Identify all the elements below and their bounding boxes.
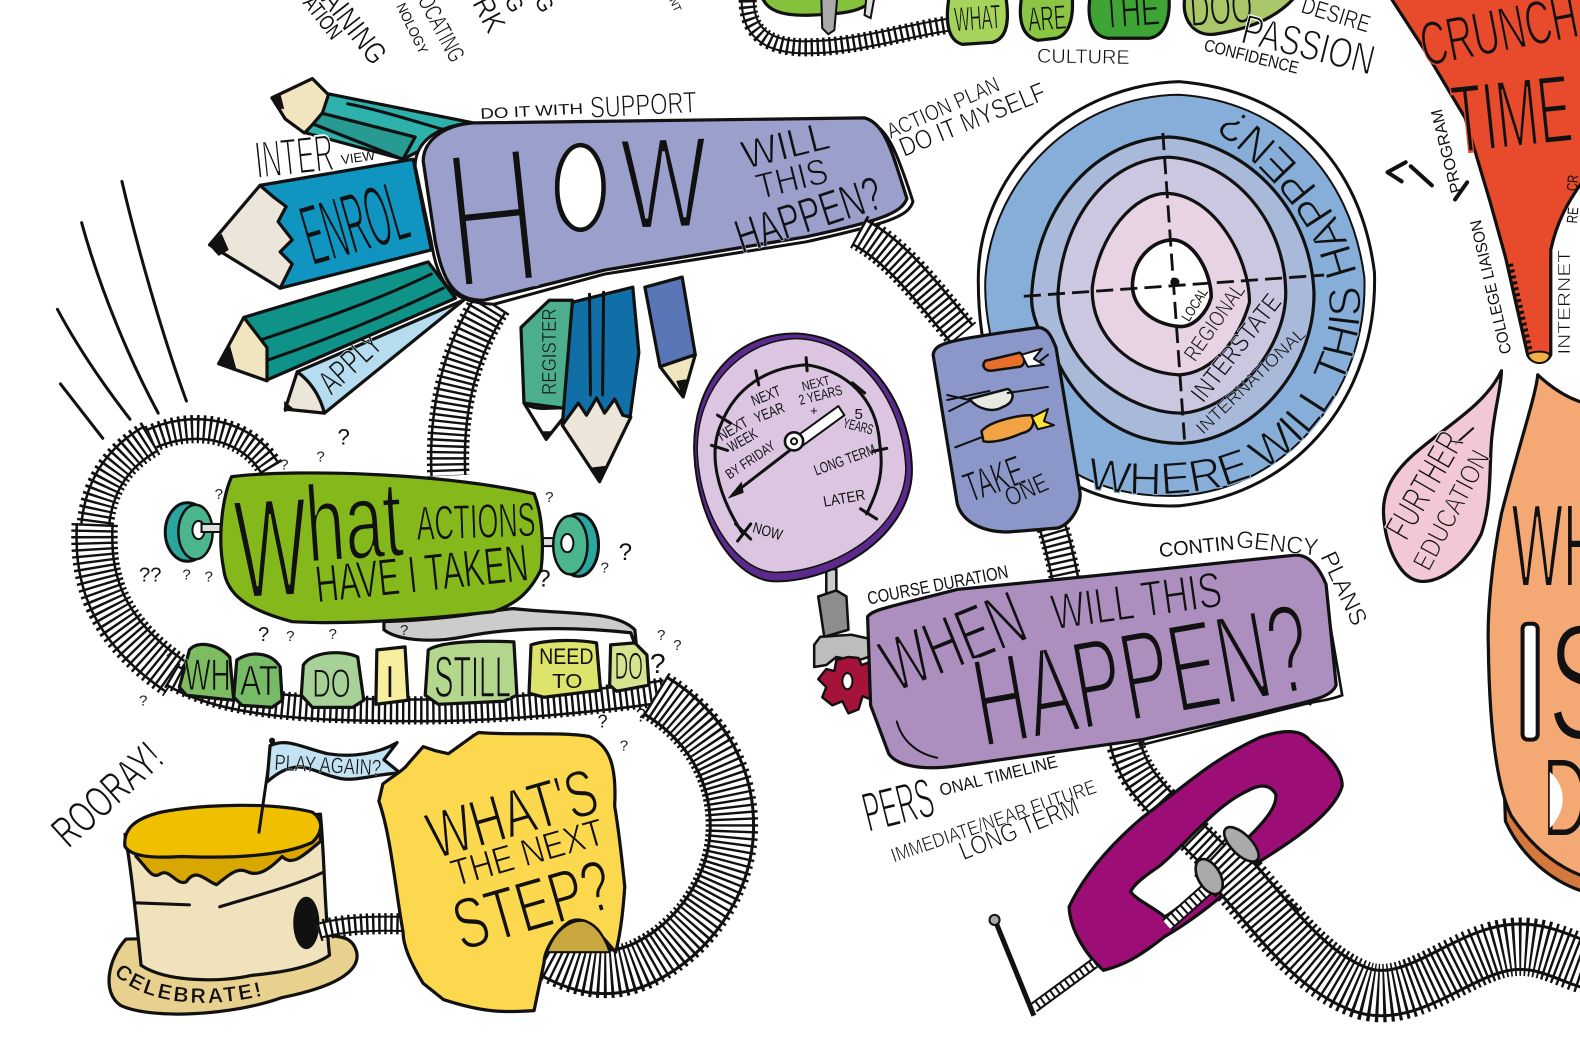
block: wh: WH xyxy=(184,651,231,700)
dial labels xyxy=(715,372,878,544)
dial scale xyxy=(715,365,881,532)
scattered question marks: ? xyxy=(657,627,665,644)
dial labels: YEARS xyxy=(842,415,875,437)
ring: regional xyxy=(1092,193,1249,375)
scattered question marks: ? xyxy=(400,622,408,639)
clamp discs xyxy=(1190,822,1264,899)
labels: course duration, contingency plans xyxy=(866,526,1372,630)
take one panel xyxy=(933,327,1080,532)
interview label xyxy=(252,124,377,190)
gauge stem xyxy=(814,569,879,667)
dial labels: WEEK xyxy=(725,426,761,456)
label: culture: CULTURE xyxy=(1037,45,1130,69)
cake plate xyxy=(109,935,357,1014)
tube: take one to when xyxy=(1046,509,1066,582)
tube: how to what actions xyxy=(448,302,492,476)
block: still xyxy=(425,641,517,710)
cake door xyxy=(293,897,319,949)
icing top xyxy=(125,805,321,857)
label: do it with support: SUPPORT xyxy=(589,86,698,125)
gauge xyxy=(694,334,912,581)
how: will this happen: HAPPEN? xyxy=(728,166,889,264)
block: still: STILL xyxy=(434,645,511,710)
heading: education: EDUCATION xyxy=(1406,444,1496,575)
icon: white radish xyxy=(947,387,1048,411)
crosshair xyxy=(1024,133,1324,446)
heading: actions: ACTIONS xyxy=(416,493,536,551)
flag xyxy=(267,743,400,782)
heading: what, hat: hat xyxy=(302,458,407,586)
labels: desire, passion, confidence xyxy=(1202,0,1380,84)
label: do it with support xyxy=(480,86,698,125)
label: action plan, do it myself: ACTION PLAN xyxy=(883,72,1003,144)
clamp handle xyxy=(990,915,1034,1016)
heading: will this: WILL THIS xyxy=(1048,560,1225,641)
tube: what actions arch xyxy=(146,429,270,469)
ring labels xyxy=(1178,279,1310,438)
dial labels: 5 xyxy=(854,406,863,423)
top word blocks xyxy=(947,0,1296,44)
label: one: ONE xyxy=(1000,467,1053,512)
dial labels: NEXT xyxy=(749,383,783,410)
scattered question marks: ? xyxy=(215,486,223,503)
block: need to: NEED xyxy=(539,644,594,669)
text: ENROL xyxy=(291,163,418,284)
pencil: teal top xyxy=(270,79,474,159)
what actions panel xyxy=(221,458,542,628)
tube: when down through the clamp xyxy=(1124,734,1290,922)
block: at: AT xyxy=(240,657,278,704)
ring labels: LOCAL xyxy=(1178,285,1211,324)
cropped text fragments at top xyxy=(298,0,683,71)
block: at xyxy=(234,654,282,707)
orange panel xyxy=(1488,375,1580,892)
labels: personal timeline: PERS xyxy=(856,766,940,844)
ring: local xyxy=(1132,240,1211,327)
white counter of letter i xyxy=(1523,624,1538,740)
icon: orange carrot xyxy=(947,349,1048,400)
icing drips xyxy=(136,821,320,885)
dial labels: + xyxy=(810,403,818,418)
further education drop xyxy=(1377,371,1501,581)
clamp screw xyxy=(1034,877,1221,1008)
white counter of letter d xyxy=(1550,772,1563,828)
curved heading: where will this happen: WHERE WILL THIS HAPPEN? xyxy=(1091,114,1360,496)
scattered question marks: ? xyxy=(328,626,337,643)
cropped text fragments at top: NOLOGY xyxy=(393,0,432,57)
target: where will this happen xyxy=(976,80,1376,508)
heading: step: STEP? xyxy=(444,844,621,967)
dial labels: NOW xyxy=(751,520,785,544)
heading: what, capital w: W xyxy=(231,467,312,628)
pencil: apply xyxy=(284,300,464,413)
label: rooray: ROORAY! xyxy=(42,733,173,857)
scattered question marks: ? xyxy=(286,628,295,645)
ring labels: INTERNATIONAL xyxy=(1192,324,1310,438)
tube: left side xyxy=(94,524,176,677)
icon: yellow carrot xyxy=(955,409,1054,447)
heading: the next: THE NEXT xyxy=(446,811,609,895)
tube: top connector xyxy=(748,0,952,47)
label: take one: TAKE xyxy=(957,446,1030,511)
pencil: blue xyxy=(562,287,639,483)
icon: red gear xyxy=(818,657,879,713)
scattered question marks: ? xyxy=(619,539,632,566)
interview label: VIEW xyxy=(340,147,377,167)
labels: personal timeline: LONG TERM xyxy=(954,791,1083,866)
scattered question marks: ? xyxy=(205,568,213,585)
labels: personal timeline: IMMEDIATE/NEAR FUTURE xyxy=(888,776,1099,867)
block: need to: TO xyxy=(552,671,582,693)
heading: happen: HAPPEN? xyxy=(962,576,1321,774)
dial labels: 2 YEARS xyxy=(797,382,844,408)
labels: course duration, contingency plans: GENCY xyxy=(1235,526,1320,562)
top green machine xyxy=(762,0,875,34)
needle xyxy=(728,406,844,499)
scattered question marks xyxy=(139,424,682,755)
heading: have i taken: HAVE I TAKEN xyxy=(313,534,531,614)
block: do small: DO xyxy=(615,645,643,688)
labels around funnel: PROGRAM xyxy=(1428,107,1466,195)
label: action plan, do it myself: DO IT MYSELF xyxy=(894,76,1050,163)
heading: how, letter H: H xyxy=(435,102,550,332)
dial labels: LONG TERM xyxy=(812,441,878,479)
labels: course duration, contingency plans: COURSE DURATION xyxy=(866,562,1010,608)
scattered question marks: ? xyxy=(258,624,269,646)
how: will this happen: THIS xyxy=(752,150,832,207)
heading: further: FURTHER xyxy=(1377,424,1473,547)
tube: under word blocks xyxy=(171,675,665,710)
scattered question marks: ? xyxy=(182,566,191,583)
grey shelf xyxy=(384,609,637,650)
how: letter O: O xyxy=(550,123,609,255)
word blocks: what do i still need to do xyxy=(179,640,649,710)
scattered question marks: ? xyxy=(545,489,554,506)
wheel: right xyxy=(539,514,599,576)
block: i: I xyxy=(386,658,394,707)
heading: what's: WHAT'S xyxy=(419,755,606,874)
how panel xyxy=(415,102,913,332)
dial labels: NEXT xyxy=(715,414,751,445)
block: i xyxy=(376,647,408,707)
labels: desire, passion, confidence: CONFIDENCE xyxy=(1202,36,1301,78)
white counter of the O xyxy=(557,145,604,230)
labels: desire, passion, confidence: PASSION xyxy=(1237,5,1380,84)
block: do xyxy=(301,653,364,707)
how: will this happen xyxy=(728,113,889,264)
dial labels: LATER xyxy=(822,487,867,511)
labels: personal timeline: ONAL TIMELINE xyxy=(938,752,1059,800)
cake seam xyxy=(135,873,322,907)
how: will this happen: WILL xyxy=(737,113,834,178)
dial labels: NEXT xyxy=(800,372,831,394)
ring labels: INTERSTATE xyxy=(1184,288,1287,408)
labels around funnel: INTERNET xyxy=(1555,249,1574,355)
label: play again: PLAY AGAIN? xyxy=(274,750,382,780)
labels: course duration, contingency plans: CONTIN xyxy=(1158,532,1235,562)
next step panel xyxy=(379,733,625,1012)
clamp xyxy=(990,732,1342,1016)
labels around funnel: COLLEGE LIAISON xyxy=(1467,218,1515,356)
block: do small xyxy=(610,643,649,691)
next step arch xyxy=(547,921,610,952)
interview label: INTER xyxy=(252,124,336,190)
cake body xyxy=(125,814,330,980)
pencil: periwinkle xyxy=(645,277,695,398)
label: register: REGISTER xyxy=(539,308,561,395)
crunch time funnel xyxy=(1390,0,1580,363)
block: need to xyxy=(529,640,601,697)
label: apply: APPLY xyxy=(311,325,390,402)
tube: wavy to the right xyxy=(1214,854,1580,993)
when panel xyxy=(868,555,1342,774)
how: letter W: W xyxy=(619,108,711,258)
flag pole xyxy=(259,742,272,832)
scattered question marks: ? xyxy=(620,738,628,755)
scattered question marks: ? xyxy=(280,457,289,474)
scattered question marks: ? xyxy=(139,692,147,709)
label: celebrate: CELEBRATE! xyxy=(116,966,260,1004)
cake xyxy=(107,738,400,1016)
ring: interstate xyxy=(1058,157,1286,413)
labels: course duration, contingency plans: PLANS xyxy=(1315,547,1372,630)
scattered question marks: ? xyxy=(316,448,325,465)
tube: cake to next step xyxy=(318,924,405,931)
radiating action lines xyxy=(57,181,186,438)
dial labels: YEAR xyxy=(752,399,787,427)
scattered question marks: ? xyxy=(163,646,172,663)
tube: arch shoulder xyxy=(95,438,151,529)
label: do it with support: DO IT WITH xyxy=(480,101,583,123)
ring: international xyxy=(1032,137,1314,443)
scattered question marks: ? xyxy=(650,647,666,679)
scattered question marks: ? xyxy=(601,559,609,576)
tube: right loop xyxy=(544,695,732,972)
labels: personal timeline xyxy=(856,752,1099,867)
wheels xyxy=(165,503,599,576)
scattered question marks: ? xyxy=(338,424,350,449)
tube: how to take one xyxy=(859,232,962,335)
labels around funnel xyxy=(1388,107,1580,356)
scattered question marks: ? xyxy=(673,637,682,654)
heading: when: WHEN xyxy=(869,575,1038,709)
heading: letter i: I xyxy=(1517,590,1543,776)
block: wh xyxy=(179,644,234,700)
dial labels: BY FRIDAY xyxy=(722,437,778,482)
pencil: enrol xyxy=(209,159,431,288)
scattered question marks: ? xyxy=(636,705,646,725)
block: do: DO xyxy=(312,661,351,706)
scattered question marks: ? xyxy=(537,565,551,592)
ring labels: REGIONAL xyxy=(1179,279,1250,366)
wheel: left xyxy=(165,503,224,561)
pencil: dark teal xyxy=(218,262,455,381)
scattered question marks: ?? xyxy=(139,564,161,586)
scattered question marks: ? xyxy=(598,711,608,731)
pencil: register xyxy=(521,300,572,440)
